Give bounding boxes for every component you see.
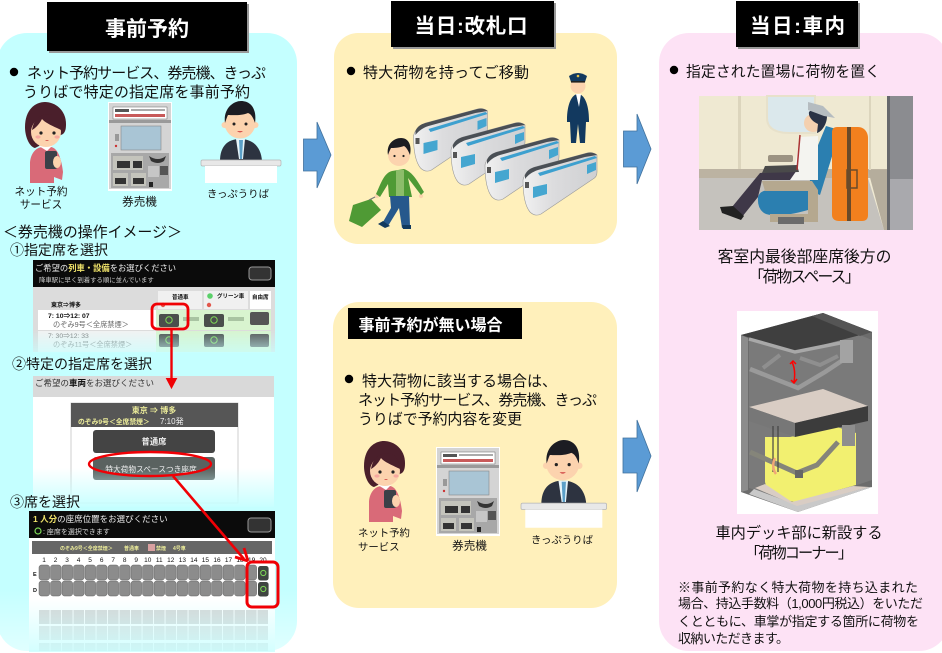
screen 3: seat selection: 13 <box>179 557 186 564</box>
screen 3: seat selection: 禁煙 <box>156 545 166 552</box>
screen 1: train selection: 7: 30⇒12: 33 <box>48 332 89 340</box>
screen 3: seat selection: 1 <box>42 557 46 564</box>
arrow: no reservation to on board <box>623 420 651 492</box>
icon: ticket machine <box>436 447 500 536</box>
screen 3: seat selection: 4号車 <box>173 545 186 552</box>
heading: no advance reservation: 事前予約が無い場合 <box>358 316 503 334</box>
step 2 label: ②特定の指定席を選択 <box>12 356 152 372</box>
note: carry-in handling fee: 場合、持込手数料（1,000円税込）をいただ <box>678 596 923 611</box>
caption: luggage space: 客室内最後部座席後方の <box>718 249 891 266</box>
screen 2: car selection: 特大荷物スペースつき座席 <box>105 464 197 474</box>
icon: woman with smartphone <box>25 102 66 183</box>
heading: advance reservation <box>47 2 249 53</box>
heading: machine operation image: ＜券売機の操作イメージ＞ <box>3 224 182 241</box>
screen 2: car selection: 普通席 <box>142 436 166 446</box>
panel: on board <box>659 33 942 651</box>
text: on board bullet: 指定された置場に荷物を置く <box>686 64 880 80</box>
screen 2: car selection: 7:10発 <box>160 417 184 426</box>
callout: red highlight and arrow to step 2 <box>152 304 188 388</box>
screen 1: train selection: ご希望の列車・設備をお選びください <box>35 263 176 273</box>
text: advance reservation bullet: うりばで特定の指定席を事前予約 <box>23 84 250 101</box>
screen 3: seat selection <box>29 511 275 652</box>
screen 1: train selection: 降車駅に早く到着する順に並んでいます <box>39 275 154 284</box>
screen 3: seat selection: 17 <box>225 557 232 564</box>
screen 2: car selection: ご希望の車両をお選びください <box>35 378 154 388</box>
text: advance reservation bullet <box>10 65 266 101</box>
icon: station attendant <box>567 73 589 143</box>
label: net reservation: ネット予約 <box>358 528 410 540</box>
heading: at the ticket gate: 当日:改札口 <box>414 15 528 38</box>
screen 1: train selection: のぞみ9号＜全席禁煙＞ <box>53 320 129 329</box>
step 3 label: ③席を選択 <box>10 494 80 510</box>
label: ticket counter: きっぷうりば <box>531 534 594 546</box>
screen 3: seat selection: 8 <box>123 557 127 564</box>
text: no reservation bullet: ネット予約サービス、券売機、きっぷ <box>358 392 597 409</box>
screen 3: seat selection: 10 <box>144 557 152 564</box>
screen 1: train selection <box>33 260 275 353</box>
screen 1: train selection: 東京⇒博多 <box>51 301 81 309</box>
caption: luggage corner: 「荷物コーナー」 <box>745 545 853 562</box>
screen 3: seat selection: 20 <box>259 557 267 564</box>
screen 3: seat selection: 12 <box>167 557 175 564</box>
illustration: ticket gates <box>414 109 597 215</box>
text: no reservation bullet: うりばで予約内容を変更 <box>358 411 522 428</box>
screen 3: seat selection: 6 <box>100 557 104 564</box>
note: carry-in handling fee <box>678 580 923 646</box>
screen 2: car selection: のぞみ9号＜全席禁煙＞ <box>78 417 150 426</box>
screen 1: train selection: グリーン車 <box>217 292 245 300</box>
text: advance reservation bullet: ネット予約サービス、券売機、きっぷ <box>27 65 266 82</box>
screen 3: seat selection: 1 人分の座席位置をお選びください <box>33 514 168 524</box>
screen 1: train selection: 自由席 <box>252 293 269 301</box>
screen 3: seat selection: のぞみ9号＜全席禁煙＞ <box>60 545 113 552</box>
icon: ticket counter clerk <box>201 101 281 183</box>
heading: no advance reservation <box>348 308 522 339</box>
screen 3: seat selection: 2 <box>54 557 58 564</box>
panel: advance reservation <box>0 33 297 651</box>
label: net reservation: サービス <box>20 199 62 211</box>
screen 1: train selection: 普通車 <box>172 293 189 301</box>
text: no reservation bullet: 特大荷物に該当する場合は、 <box>362 373 557 390</box>
heading: at the ticket gate <box>391 1 556 49</box>
note: carry-in handling fee: ※事前予約なく特大荷物を持ち込まれた <box>678 580 918 595</box>
illustration: luggage space behind the rear seat <box>699 96 913 230</box>
screen 3: seat selection: 11 <box>156 557 163 564</box>
icon: ticket machine <box>108 102 172 191</box>
screen 3: seat selection: 3 <box>65 557 69 564</box>
callout: red highlight and arrow to step 3 <box>89 452 278 607</box>
panel: no advance reservation <box>333 302 617 608</box>
screen 3: seat selection: 18 <box>236 557 244 564</box>
icon: traveller with suitcase <box>349 138 424 229</box>
illustration: luggage corner cabinet <box>737 311 878 514</box>
heading: advance reservation: 事前予約 <box>105 17 189 41</box>
icon: woman with smartphone <box>364 441 405 522</box>
note: carry-in handling fee: 収納いただきます。 <box>678 631 789 646</box>
screen 3: seat selection: 14 <box>190 557 198 564</box>
note: carry-in handling fee: くとともに、車掌が指定する箇所に荷物を <box>678 614 919 629</box>
icon: ticket counter clerk <box>521 440 607 528</box>
panel: at the ticket gate <box>334 33 617 244</box>
screen 3: seat selection: D <box>33 588 37 594</box>
label: net reservation: サービス <box>358 542 400 554</box>
screen 1: train selection: のぞみ11号＜全席禁煙＞ <box>53 340 132 349</box>
screen 1: train selection: 7: 10⇒12: 07 <box>48 312 90 320</box>
label: ticket counter: きっぷうりば <box>207 188 270 200</box>
screen 3: seat selection: 19 <box>248 557 256 564</box>
label: ticket machine: 券売機 <box>122 194 157 208</box>
screen 3: seat selection: 9 <box>134 557 138 564</box>
screen 3: seat selection: 16 <box>213 557 221 564</box>
screen 3: seat selection: 15 <box>202 557 209 564</box>
caption: luggage corner: 車内デッキ部に新設する <box>715 525 883 542</box>
screen 2: car selection <box>33 376 274 507</box>
screen 3: seat selection: 普通車 <box>124 545 139 552</box>
screen 3: seat selection: E <box>33 572 37 578</box>
step 1 label: ①指定席を選択 <box>10 242 108 258</box>
screen 3: seat selection: 5 <box>88 557 92 564</box>
heading: on board <box>736 1 860 49</box>
arrow: advance reservation to gate <box>304 122 331 188</box>
label: net reservation: ネット予約 <box>15 186 67 198</box>
label: ticket machine: 券売機 <box>452 538 487 552</box>
heading: on board: 当日:車内 <box>750 15 845 38</box>
screen 3: seat selection: : 座席を選択できます <box>43 527 110 536</box>
arrow: gate to on board <box>624 114 651 184</box>
text: gate bullet: 特大荷物を持ってご移動 <box>363 64 529 82</box>
screen 2: car selection: 東京 ⇒ 博多 <box>132 405 176 415</box>
text: no reservation bullet <box>345 373 597 428</box>
caption: luggage space: 「荷物スペース」 <box>748 268 860 286</box>
screen 3: seat selection: 7 <box>111 557 115 564</box>
screen 3: seat selection: 4 <box>77 557 81 564</box>
